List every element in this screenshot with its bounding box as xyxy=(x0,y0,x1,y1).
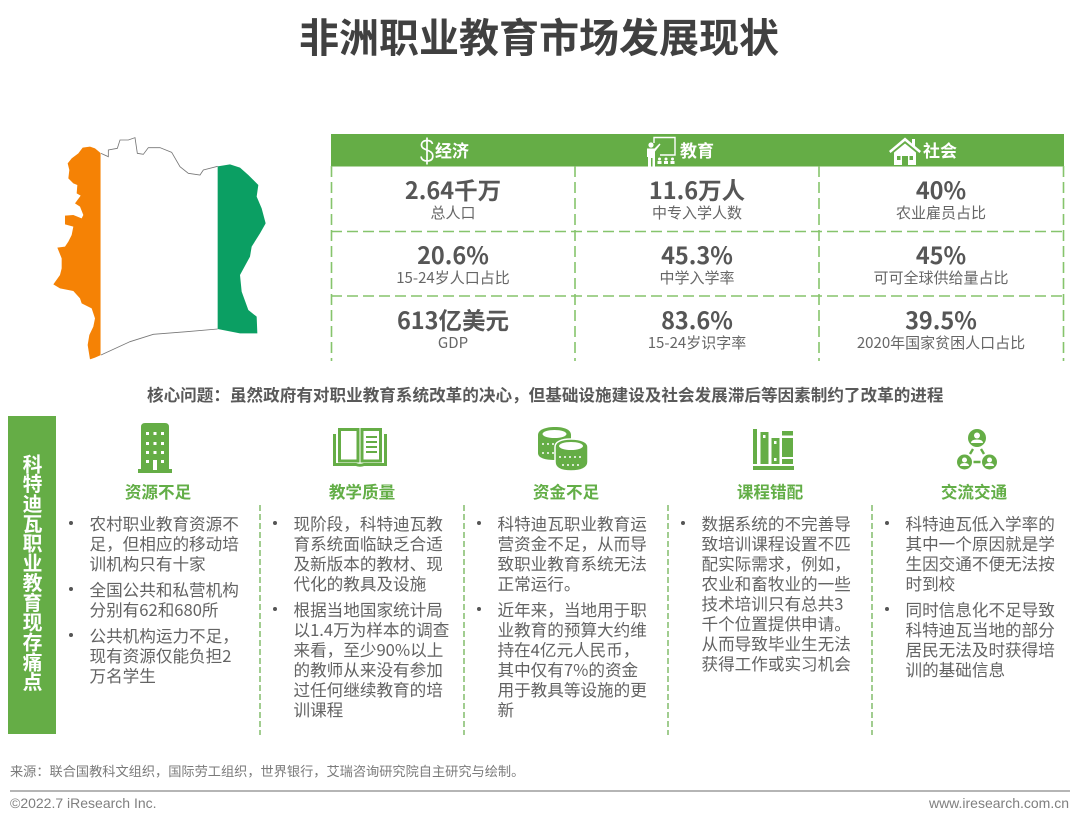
column header: society xyxy=(889,137,957,165)
text block: curriculum mismatch xyxy=(681,511,851,675)
stat: population aged 15-24: 20.6% xyxy=(417,237,489,271)
text block: curriculum mismatch: 配实际需求，例如， xyxy=(702,551,851,575)
text block: teaching quality xyxy=(273,511,449,721)
text block: resources: 分别有62和680所 xyxy=(90,597,219,621)
icon: bookshelf xyxy=(753,429,794,470)
stat: global supply share: 45% xyxy=(916,237,966,271)
text block: teaching quality: 现阶段，科特迪瓦教 xyxy=(294,511,443,535)
icon: connected people xyxy=(957,429,997,470)
text block: funding: 近年来，当地用于职 xyxy=(498,597,647,621)
text block: teaching quality: 及新版本的教材、现 xyxy=(294,551,443,575)
column header: economy xyxy=(420,137,469,164)
label: education: 教育 xyxy=(680,137,714,162)
stat: total population: 总人口 xyxy=(430,202,476,223)
stat: population aged 15-24: 15-24岁人口占比 xyxy=(396,267,510,288)
text block: curriculum mismatch: 技术培训只有总共3 xyxy=(702,591,843,615)
stat: secondary enrolment: 中学入学率 xyxy=(659,267,734,288)
text block: transport and communication: 居民无法及时获得培 xyxy=(906,637,1055,661)
stat: total population: 2.64千万 xyxy=(405,172,501,206)
stat: literacy xyxy=(648,302,746,353)
text block: transport and communication: 其中一个原因就是学 xyxy=(906,531,1055,555)
stat: GDP: GDP xyxy=(438,332,468,353)
heading: funding: 资金不足 xyxy=(533,479,599,503)
stats table grid xyxy=(330,134,1064,361)
icon: teacher xyxy=(647,136,676,166)
website: www.iresearch.com.cn xyxy=(929,795,1069,811)
text block: transport and communication: 生因交通不便无法按 xyxy=(906,551,1055,575)
text block: funding xyxy=(477,511,647,721)
icon: house xyxy=(889,138,921,165)
title: 非洲职业教育市场发展现状 xyxy=(299,6,779,64)
text block: funding: 其中仅有7%的资金 xyxy=(498,657,638,681)
banner text: 科特迪瓦职业教育现存痛点 xyxy=(18,454,47,691)
text block: teaching quality: 以1.4万为样本的调查 xyxy=(294,617,449,641)
stat: poverty: 39.5% xyxy=(905,302,977,336)
core issue statement: 核心问题：虽然政府有对职业教育系统改革的决心，但基础设施建设及社会发展滞后等因素制约了改革的进程 xyxy=(147,382,944,406)
text block: transport and communication xyxy=(885,511,1055,681)
stat: vocational enrolment: 11.6万人 xyxy=(649,172,745,206)
text block: funding: 业教育的预算大约维 xyxy=(498,617,647,641)
heading: curriculum mismatch: 课程错配 xyxy=(737,479,803,503)
text block: teaching quality: 训课程 xyxy=(294,697,343,721)
text block: teaching quality: 代化的教具及设施 xyxy=(294,571,426,595)
text block: curriculum mismatch: 农业和畜牧业的一些 xyxy=(702,571,851,595)
text block: funding: 科特迪瓦职业教育运 xyxy=(498,511,647,535)
text block: resources: 公共机构运力不足， xyxy=(90,623,239,647)
stat: GDP: 613亿美元 xyxy=(397,302,509,336)
label: society: 社会 xyxy=(923,137,957,162)
stat: literacy: 15-24岁识字率 xyxy=(648,332,746,353)
stat: agricultural employment xyxy=(896,172,986,223)
text block: curriculum mismatch: 千个位置提供申请。 xyxy=(702,611,851,635)
stat: literacy: 83.6% xyxy=(661,302,733,336)
text block: teaching quality: 的教师从来没有参加 xyxy=(294,657,443,681)
icon: building xyxy=(138,423,172,473)
text block: transport and communication: 同时信息化不足导致 xyxy=(906,597,1055,621)
text block: teaching quality: 过任何继续教育的培 xyxy=(294,677,443,701)
text block: resources: 足，但相应的移动培 xyxy=(90,531,239,555)
text block: resources: 万名学生 xyxy=(90,663,156,687)
stat: vocational enrolment: 中专入学人数 xyxy=(652,202,742,223)
text block: curriculum mismatch: 数据系统的不完善导 xyxy=(702,511,851,535)
source note: 来源：联合国教科文组织，国际劳工组织，世界银行，艾瑞咨询研究院自主研究与绘制。 xyxy=(10,761,524,780)
heading: teaching quality: 教学质量 xyxy=(329,479,395,503)
text block: funding: 用于教具等设施的更 xyxy=(498,677,647,701)
stat: agricultural employment: 40% xyxy=(916,172,966,206)
copyright: ©2022.7 iResearch Inc. xyxy=(10,795,157,811)
text block: curriculum mismatch: 获得工作或实习机会 xyxy=(702,651,851,675)
stat: global supply share xyxy=(873,237,1008,288)
text block: resources xyxy=(69,511,239,687)
text block: curriculum mismatch: 致培训课程设置不匹 xyxy=(702,531,851,555)
text block: transport and communication: 科特迪瓦当地的部分 xyxy=(906,617,1055,641)
stat: global supply share: 可可全球供给量占比 xyxy=(873,267,1008,288)
text block: funding: 致职业教育系统无法 xyxy=(498,551,647,575)
text block: resources: 训机构只有十家 xyxy=(90,551,206,575)
stat: agricultural employment: 农业雇员占比 xyxy=(896,202,986,223)
stat: poverty: 2020年国家贫困人口占比 xyxy=(857,332,1025,353)
side banner xyxy=(8,416,56,734)
text block: transport and communication: 时到校 xyxy=(906,571,955,595)
text block: funding: 持在4亿元人民币， xyxy=(498,637,639,661)
heading: transport and communication: 交流交通 xyxy=(941,479,1007,503)
label: economy: 经济 xyxy=(435,137,469,162)
text block: resources: 农村职业教育资源不 xyxy=(90,511,239,535)
icon: open book xyxy=(333,428,387,467)
stat: GDP xyxy=(397,302,509,353)
text block: resources: 现有资源仅能负担2 xyxy=(90,643,231,667)
column header: education xyxy=(647,136,714,166)
text block: funding: 正常运行。 xyxy=(498,571,580,595)
text block: teaching quality: 来看，至少90%以上 xyxy=(294,637,443,661)
map: Côte d'Ivoire outline in flag colours xyxy=(54,137,266,360)
stat: vocational enrolment xyxy=(649,172,745,223)
stat: poverty xyxy=(857,302,1025,353)
stat: secondary enrolment xyxy=(659,237,734,288)
text block: transport and communication: 科特迪瓦低入学率的 xyxy=(906,511,1055,535)
column dividers xyxy=(259,505,873,735)
text block: teaching quality: 育系统面临缺乏合适 xyxy=(294,531,443,555)
text block: resources: 全国公共和私营机构 xyxy=(90,577,239,601)
stat: secondary enrolment: 45.3% xyxy=(661,237,733,271)
text block: teaching quality: 根据当地国家统计局 xyxy=(294,597,443,621)
stat: total population xyxy=(405,172,501,223)
text block: funding: 营资金不足，从而导 xyxy=(498,531,647,555)
text block: funding: 新 xyxy=(498,697,514,721)
heading: resources: 资源不足 xyxy=(125,479,191,503)
stat: population aged 15-24 xyxy=(396,237,510,288)
icon: dollar xyxy=(420,138,434,164)
text block: curriculum mismatch: 从而导致毕业生无法 xyxy=(702,631,851,655)
icon: coins xyxy=(538,427,588,470)
text block: transport and communication: 训的基础信息 xyxy=(906,657,1005,681)
